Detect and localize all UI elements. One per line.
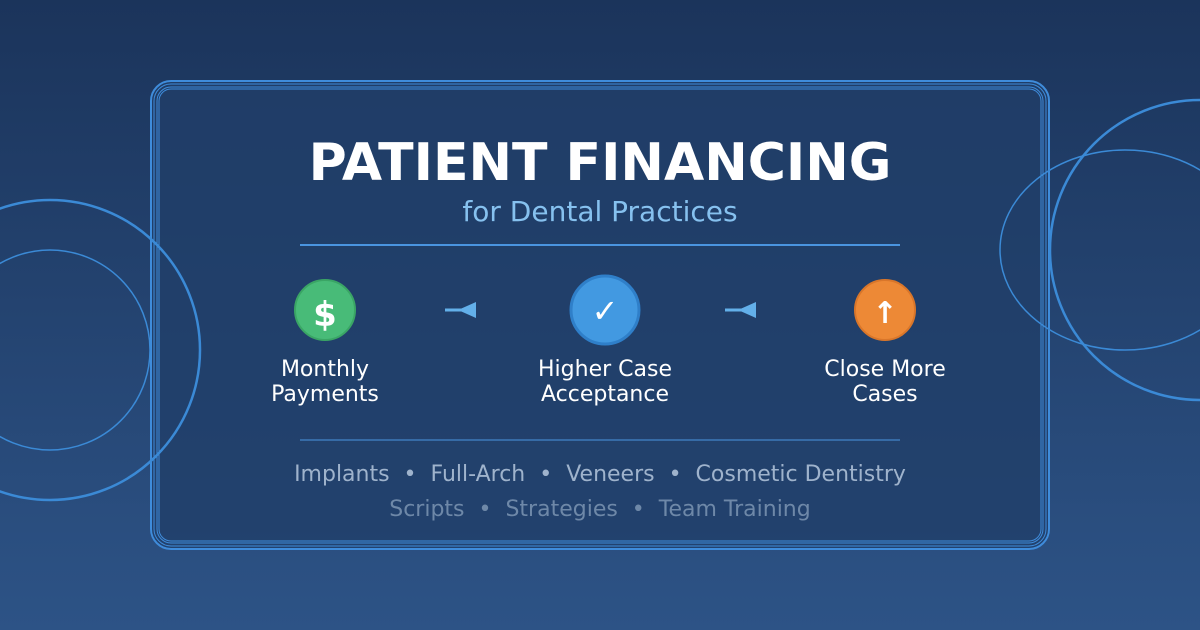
title: PATIENT FINANCING [309, 133, 891, 193]
resources list: Scripts • Strategies • Team Training [389, 497, 811, 522]
step: close more cases [824, 280, 946, 407]
step: monthly payments [271, 280, 379, 407]
arrow 1 [445, 302, 476, 318]
decorative circles left [0, 200, 200, 500]
step: close more cases: Close More [824, 357, 946, 382]
services list: Implants • Full-Arch • Veneers • Cosmetic Dentistry [294, 462, 906, 487]
step: close more cases: Cases [852, 382, 918, 407]
step: higher case acceptance: Acceptance [541, 382, 669, 407]
step: higher case acceptance: ✓ [592, 292, 618, 330]
decorative circles right [1000, 100, 1200, 400]
step: close more cases: ↑ [872, 296, 898, 331]
step: monthly payments: Monthly [281, 357, 369, 382]
step: monthly payments: Payments [271, 382, 379, 407]
step: monthly payments: $ [313, 295, 337, 335]
step: higher case acceptance: Higher Case [538, 357, 672, 382]
subtitle: for Dental Practices [462, 195, 738, 228]
panel [151, 81, 1049, 549]
arrow 2 [725, 302, 756, 318]
step: higher case acceptance [538, 276, 672, 407]
